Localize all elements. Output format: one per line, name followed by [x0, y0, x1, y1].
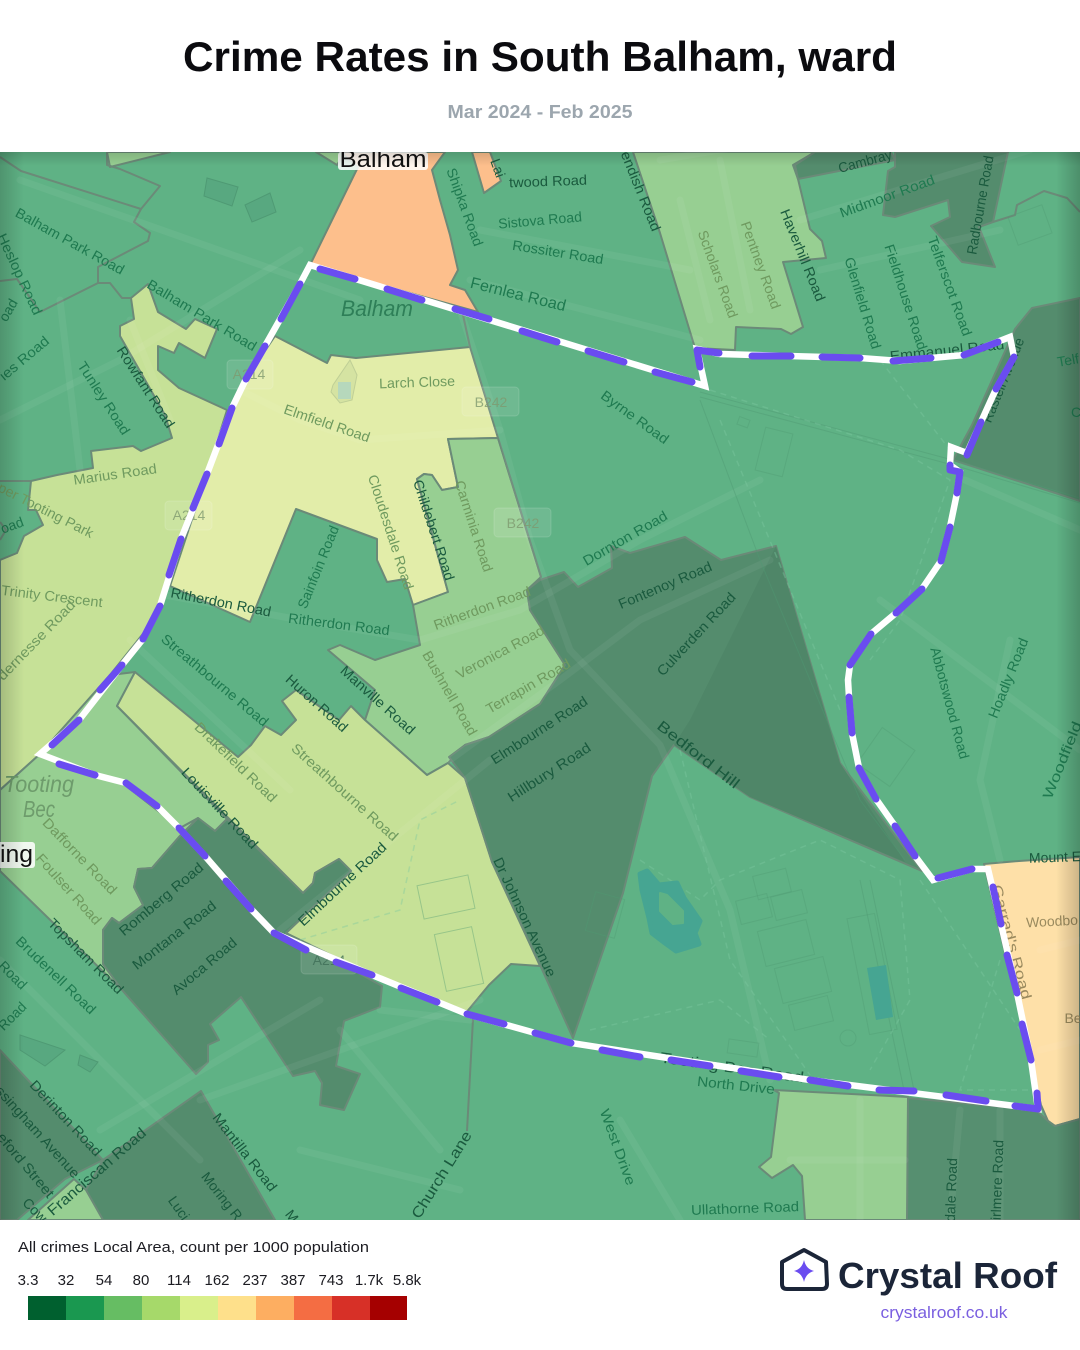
region: Elmfield, pale yellow — [170, 336, 498, 622]
road labels: mid green: Abbotswood Road — [927, 645, 973, 761]
legend scale values: 162 — [204, 1272, 230, 1289]
road labels: mid green — [0, 166, 1080, 1218]
road labels: dark on boundaries: Church Lane — [408, 1128, 476, 1222]
road labels: faded on light regions: Scholars Road — [695, 228, 741, 320]
road labels: dark on boundaries: Manville Road — [337, 662, 419, 738]
road labels: mid green: Tunley Road — [74, 358, 134, 438]
Tooting Bec Common lake — [640, 871, 700, 951]
region: Furzedown east, dark green — [907, 1098, 1080, 1220]
road labels: faded on light regions: Elmfield Road — [282, 401, 372, 445]
legend scale values: 387 — [280, 1272, 306, 1289]
road labels: dark on boundaries: Fontenoy Road — [616, 558, 714, 612]
place label: Balham town: Balham — [340, 146, 426, 173]
road labels: dark on boundaries: Cow — [19, 1194, 51, 1226]
region: Telford, dark green — [953, 298, 1080, 501]
region: Derinton Road, dark green — [0, 1050, 103, 1220]
road labels: mid green: Byrne Road — [598, 387, 672, 447]
region: Mantilla Road, dark green — [86, 1091, 275, 1220]
road shield labels: A214 — [173, 507, 206, 523]
region: Scholars Road, light green — [633, 152, 826, 350]
crime rate regions — [0, 152, 1080, 1220]
local road network — [66, 156, 1006, 1219]
legend scale values: 32 — [58, 1272, 74, 1289]
road shields — [165, 360, 551, 974]
road labels: dark on boundaries: Luci — [165, 1193, 193, 1223]
ward boundary: white base line — [40, 265, 1038, 1109]
region: Balham Wood, dark green — [449, 537, 922, 1038]
region: Cambray, dark green — [795, 152, 895, 179]
legend scale values: 237 — [242, 1272, 268, 1289]
road labels: dark on boundaries: Dr Johnson Avenue — [490, 855, 560, 979]
road shield labels — [173, 366, 540, 968]
region: Franciscan corner, light green — [28, 1179, 103, 1220]
road labels: mid green: Brudenell Road — [13, 933, 99, 1017]
legend scale values: 3.3 — [18, 1272, 38, 1289]
buildings top left — [20, 178, 276, 1072]
road labels: mid green: Woodfield — [1039, 719, 1080, 801]
place label: Bec: Bec — [23, 796, 55, 822]
road labels: dark on boundaries: Bedford Hill — [653, 718, 743, 792]
road labels: dark on boundaries: Franciscan Road — [44, 1125, 150, 1219]
road labels: dark on boundaries: Romberg Road — [116, 859, 206, 939]
road labels: mid green: Streathbourne Road — [158, 630, 272, 730]
road labels: dark on boundaries: Avoca Road — [168, 934, 240, 998]
lido pool — [867, 965, 893, 1020]
region: Carminia and Bushnell, light green — [328, 438, 565, 775]
road labels: dark on boundaries: Tooting Bec Road — [659, 1049, 805, 1087]
road labels: dark on boundaries: Radbourne Road — [963, 154, 997, 256]
park paths — [300, 360, 1030, 1090]
legend scale values: 80 — [133, 1272, 149, 1289]
road labels: dark on boundaries: Lai — [487, 156, 509, 180]
place label: Balham district italic: Balham — [341, 296, 413, 321]
railway lines — [700, 392, 1080, 1095]
road labels: mid green: North Drive — [696, 1073, 776, 1097]
road labels: dark on boundaries: dale Road — [942, 1158, 960, 1222]
road labels: dark on boundaries: Cambray — [836, 146, 894, 176]
road labels: dark on boundaries: Hillbury Road — [504, 739, 594, 805]
road labels: dark on boundaries: M — [282, 1206, 302, 1226]
road labels: mid green: Hoadly Road — [985, 636, 1031, 720]
logo: Crystal Roof — [782, 1250, 1058, 1322]
road labels: faded on light regions: Veronica Road — [453, 622, 547, 682]
road labels: dark on boundaries: Childebert Road — [410, 478, 458, 582]
legend scale values: 5.8k — [393, 1272, 422, 1289]
road labels: faded on light regions: Streathbourne Road — [288, 740, 402, 844]
region: North Drive, light green — [759, 1090, 908, 1220]
subtitle: date range: Mar 2024 - Feb 2025 — [448, 102, 632, 122]
road labels: faded on light regions: Trinity Crescent — [0, 582, 104, 610]
Larch Close pond — [331, 360, 357, 403]
website: crystalroof.co.uk — [880, 1304, 1008, 1322]
road labels: mid green: Sainfoin Road — [294, 523, 342, 611]
road labels: dark on boundaries: Elmbourne Road — [294, 839, 390, 929]
road labels: faded on light regions: Woodbo — [1026, 912, 1079, 930]
road labels: faded on light regions: Drakefield Road — [192, 719, 280, 805]
legend title: All crimes Local Area, count per 1000 population — [18, 1239, 369, 1256]
road labels: faded on light regions: Terrapin Road — [483, 655, 573, 717]
region: Laitwood sliver, orange — [472, 152, 501, 193]
road labels: mid green: Balham Park Road — [13, 204, 127, 278]
road labels: mid green: Balham Park Road — [144, 276, 260, 354]
legend scale values: 114 — [167, 1272, 191, 1289]
road labels: faded on light regions: Carminia Road — [452, 478, 496, 574]
road labels: dark on boundaries: Rastell Avenue — [979, 335, 1027, 425]
legend scale values: 743 — [318, 1272, 344, 1289]
region: Louisville strip, light green — [40, 672, 227, 831]
road labels: mid green: Telferscot Road — [925, 234, 975, 338]
title: Crime Rates in South Balham, ward — [183, 33, 897, 80]
road labels: mid green: Fieldhouse Road — [881, 242, 931, 352]
road labels: mid green: Midmoor Road — [837, 171, 937, 221]
road shield labels: B242 — [507, 515, 540, 531]
road labels: mid green: Dornton Road — [580, 507, 670, 569]
road labels: faded on light regions: Pentney Road — [738, 219, 784, 311]
road labels: dark on boundaries: Louisville Road — [178, 764, 262, 852]
road labels: mid green: Shipka Road — [443, 166, 487, 248]
road labels: dark on boundaries: Emmanuel Road — [889, 336, 1005, 364]
road shield labels: A214 — [313, 952, 346, 968]
road labels: dark on boundaries: Derinton Road — [27, 1077, 105, 1159]
road labels: mid green: Ullathorne Road — [691, 1198, 799, 1218]
legend scale values — [18, 1272, 422, 1289]
icon: house with star — [782, 1250, 827, 1289]
road labels: mid green: Rossiter Road — [511, 237, 605, 267]
road labels: dark on boundaries: twood Road — [509, 172, 587, 190]
place label: Tooting town: ing — [0, 841, 33, 868]
road labels: faded on light regions: Foulser Road — [33, 850, 105, 928]
region: Garrad's Road, tan — [984, 857, 1080, 1126]
region: Radbourne, dark green — [883, 152, 1008, 267]
legend scale values: 1.7k — [355, 1272, 384, 1289]
road labels: faded on light regions — [0, 219, 1080, 1026]
road labels: faded on light regions: Ritherdon Road — [431, 583, 533, 633]
road labels: dark on boundaries: irlmere Road — [988, 1140, 1006, 1220]
region: top strip, light green — [107, 152, 170, 167]
road labels: mid green: West Drive — [597, 1107, 639, 1188]
road labels: mid green: Fernlea Road — [468, 275, 568, 315]
road labels: dark on boundaries: Culverden Road — [653, 589, 739, 679]
road labels: mid green: Ritherdon Road — [287, 610, 391, 638]
region: Tooting Bec west, light green — [0, 754, 198, 990]
road labels: dark on boundaries: Montana Road — [129, 897, 219, 973]
road labels: dark on boundaries: Mount E — [1029, 848, 1080, 866]
region: Balham centre, orange — [310, 152, 478, 312]
road labels: dark on boundaries: Ritherdon Road — [169, 584, 273, 620]
legend — [18, 1239, 422, 1320]
road labels: dark on boundaries: Rowfant Road — [114, 343, 178, 431]
region: Tooting Park, yellow-green — [0, 284, 227, 790]
park pitches — [417, 205, 1052, 1057]
legend colour bar — [28, 1296, 407, 1320]
place label: Tooting Bec station: Tooting — [4, 771, 74, 797]
road labels: dark on boundaries: Mantilla Road — [209, 1110, 281, 1194]
legend scale values: 54 — [96, 1272, 112, 1289]
road labels: dark on boundaries: Haverhill Road — [777, 207, 829, 303]
road labels: mid green: Telf — [1056, 350, 1080, 370]
ward boundary: purple dashes — [52, 269, 1038, 1109]
region: Drakefield and Streathbourne, yellow-green — [117, 672, 540, 1014]
wordmark: Crystal Roof — [838, 1255, 1058, 1296]
map edge shading — [0, 152, 1080, 1220]
road labels: faded on light regions: Bushnell Road — [419, 648, 481, 738]
region: top left sliver, light green — [316, 152, 345, 165]
road labels: dark on boundaries: Moring R — [198, 1169, 246, 1223]
road shield labels: B242 — [475, 394, 508, 410]
road labels: mid green: Sistova Road — [497, 208, 583, 232]
region: Romberg Road, dark green — [103, 818, 382, 1110]
road labels: mid green: Glenfield Road — [841, 255, 885, 351]
road labels: faded on light regions: Dafforne Road — [40, 814, 120, 898]
road labels: faded on light regions: Garrad's Road — [989, 883, 1035, 1001]
road labels: dark on boundaries: Huron Road — [283, 671, 351, 735]
road labels: faded on light regions: Cloudesdale Road — [365, 472, 417, 592]
road labels: dark on boundaries: Elmbourne Road — [488, 693, 590, 767]
road labels: faded on light regions: Marius Road — [72, 460, 158, 488]
road labels: faded on light regions: Larch Close — [379, 373, 455, 391]
darker wedge of Balham Wood — [674, 546, 850, 839]
road labels: dark on boundaries: endish Road — [618, 149, 664, 233]
other region border lines — [0, 152, 1080, 1131]
road labels: dark on boundaries: Topsham Road — [45, 915, 127, 997]
road shield labels: A214 — [233, 366, 266, 382]
